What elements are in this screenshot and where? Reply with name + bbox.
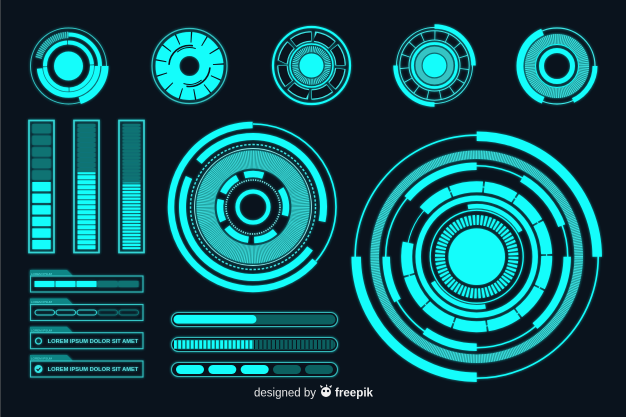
chart: medium radial gauge: [137, 91, 369, 323]
panel: checked option: LOREM IPSUM: [31, 357, 53, 361]
panel: pill progress: [30, 298, 143, 320]
panel: radio option: LOREM IPSUM DOLOR SIT AMET: [48, 339, 139, 345]
footer: attribution: [254, 384, 373, 400]
bar: medium stripes level: [74, 120, 99, 252]
icon: small gauge 1: [30, 28, 106, 104]
panel: pill progress: LOREM IPSUM: [31, 300, 53, 304]
slider: pills: [172, 362, 338, 376]
panel: radio option: [30, 327, 143, 349]
slider: solid: [172, 312, 338, 326]
panel: radio option: LOREM IPSUM: [31, 328, 53, 332]
footer: attribution: freepik: [335, 386, 373, 400]
bar: segmented level: [29, 120, 54, 252]
footer: attribution: designed by: [254, 388, 316, 400]
icon: small gauge 2: [150, 26, 229, 106]
slider: ticked: [172, 338, 338, 352]
icon: small gauge 5: [509, 18, 605, 114]
icon: freepik logo: [320, 384, 332, 397]
bar: fine stripes level: [119, 120, 144, 252]
panel: checked option: LOREM IPSUM DOLOR SIT AMET: [48, 367, 139, 373]
panel: checked option: [30, 355, 143, 377]
chart: large radial gauge: [349, 129, 604, 384]
panel: segmented progress: [30, 270, 143, 292]
icon: small gauge 4: [396, 26, 474, 104]
icon: small gauge 3: [273, 27, 350, 104]
panel: segmented progress: LOREM IPSUM: [31, 272, 53, 276]
